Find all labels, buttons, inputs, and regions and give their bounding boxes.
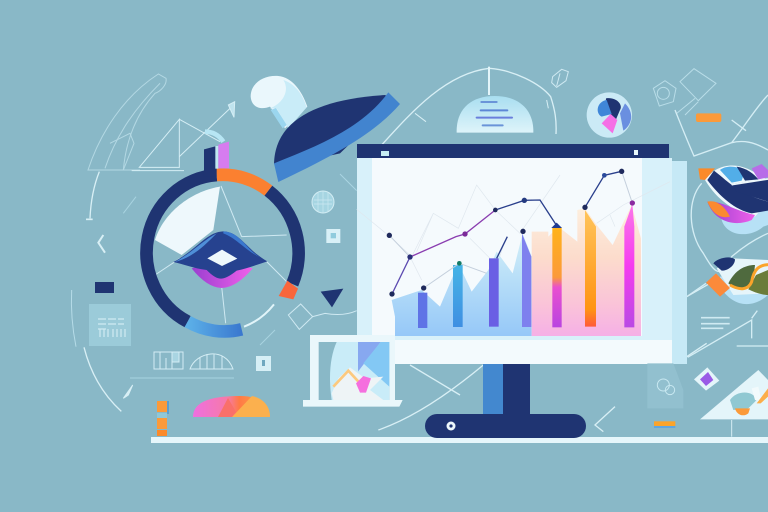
gauge top tab	[204, 142, 229, 177]
tick on arc	[415, 100, 548, 122]
protractor sketch	[88, 74, 166, 170]
outer left stroke	[71, 290, 76, 347]
link chip sketch	[288, 304, 357, 329]
small square marker	[256, 356, 271, 371]
lamp navy dome	[274, 95, 395, 167]
hanging stem	[486, 67, 492, 95]
small square icon	[326, 229, 340, 243]
diagonal tick	[340, 174, 357, 191]
gauge red tip	[279, 281, 298, 299]
bell note	[457, 96, 533, 133]
laptop foot	[303, 400, 403, 407]
data points	[387, 169, 635, 297]
stand blue side	[483, 363, 503, 415]
triangle and arrow sketch	[132, 102, 235, 171]
globe icon	[312, 191, 334, 213]
text lines icon	[701, 318, 730, 328]
bar 2	[453, 265, 463, 327]
top centre arc and note	[382, 67, 632, 145]
lines behind monitor	[378, 283, 710, 432]
trend line navy segment	[495, 171, 622, 258]
bird mark	[123, 385, 133, 398]
connector arc	[382, 68, 556, 145]
lower right lines	[688, 283, 768, 357]
screen white area	[372, 158, 642, 336]
navy legend chip	[95, 282, 114, 293]
faint grid lines	[357, 175, 670, 280]
monitor	[357, 144, 687, 364]
connector lines	[675, 95, 768, 156]
small chart sketches	[130, 352, 234, 378]
code panel	[89, 304, 131, 346]
orange chip	[654, 421, 675, 428]
stand navy column	[503, 363, 530, 415]
desk baseline	[151, 437, 768, 443]
lamp blue band	[274, 92, 400, 182]
laptop orange chevron	[333, 371, 360, 387]
lamp white neck	[251, 76, 307, 128]
leaf sketch	[552, 69, 568, 87]
monitor stand	[425, 363, 586, 438]
bar 3	[489, 258, 499, 327]
trend line	[392, 257, 410, 294]
lower left arc	[84, 347, 121, 411]
laptop blue image	[330, 342, 389, 400]
laptop pink gem	[356, 376, 371, 393]
lower right marks	[647, 363, 683, 428]
laptop outer frame	[310, 335, 395, 402]
base button	[446, 422, 456, 430]
monitor side panel	[642, 161, 687, 364]
laptop inner screen	[319, 342, 389, 400]
lamp shadow stripe	[271, 108, 287, 128]
laptop purple shard	[358, 342, 381, 372]
upper ribbon emblem	[698, 164, 768, 234]
link rings	[657, 379, 675, 395]
gauge	[147, 142, 357, 331]
laptop blue shard	[363, 342, 389, 387]
lower right triangle	[700, 370, 768, 437]
orange pill	[696, 113, 721, 122]
top right sketches	[653, 69, 716, 115]
left line art	[71, 74, 275, 411]
gauge orange segment	[217, 175, 268, 191]
faint trend connectors	[389, 171, 632, 288]
dome lamp	[251, 76, 400, 182]
gradient colour blob	[193, 396, 270, 417]
pie orb	[587, 92, 632, 138]
bar 4	[522, 233, 531, 327]
pink area	[532, 205, 641, 336]
small laptop frame	[303, 335, 403, 407]
stand base	[425, 414, 586, 438]
gauge centre diamond	[173, 231, 267, 288]
faint square	[647, 363, 683, 408]
diamond icon	[694, 367, 719, 391]
bar 6	[585, 210, 596, 327]
bar 5	[552, 227, 562, 327]
stacked colour column	[157, 401, 169, 436]
large loop	[691, 183, 768, 271]
gauge white wedge	[155, 187, 220, 255]
lower ribbon emblem	[706, 257, 768, 304]
monitor title bar	[357, 144, 669, 158]
navy triangle marker	[321, 289, 343, 307]
monitor screen	[357, 158, 672, 340]
laptop mountain	[332, 367, 383, 400]
faint tick marks	[123, 197, 275, 345]
left arc sketch	[90, 172, 99, 218]
lamp neck highlight	[270, 80, 307, 128]
bar 7	[624, 204, 634, 327]
trend line purple segment	[410, 210, 495, 257]
monitor lower bezel	[390, 340, 672, 364]
gauge blue segment	[188, 322, 242, 331]
right side illustration	[653, 69, 768, 437]
chevron mark	[98, 235, 105, 253]
line chart with bars	[357, 169, 670, 336]
gauge spokes	[155, 186, 290, 323]
note lines	[477, 102, 512, 125]
gauge thin arc	[244, 304, 274, 327]
gauge navy ring	[147, 175, 299, 322]
blue area	[392, 233, 532, 336]
bar 1	[418, 293, 427, 328]
